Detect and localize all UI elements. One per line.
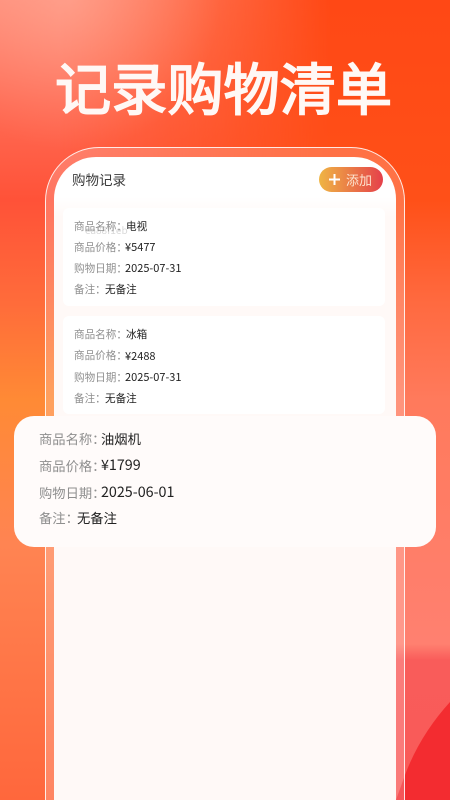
highlighted record card: range hood: 油烟机 — [101, 429, 141, 448]
record text: TV: 购物日期： — [74, 261, 127, 276]
record card: TV — [63, 208, 385, 306]
title: 记录购物清单 — [55, 46, 392, 127]
icon: plus — [329, 174, 340, 185]
record text: fridge: 购物日期： — [74, 370, 127, 385]
record text: fridge: 2025-07-31 — [125, 369, 181, 385]
record text: fridge: 商品价格： — [74, 348, 127, 363]
watermark: ea88f1eb — [85, 222, 128, 237]
record text: TV: 商品价格： — [74, 240, 127, 255]
name row: 商品名称： — [39, 429, 105, 448]
price row: 商品价格： — [39, 456, 105, 475]
record text: fridge: 无备注 — [105, 391, 137, 406]
record text: TV: 电视 — [126, 219, 147, 234]
phone screen — [54, 157, 396, 800]
highlighted record card: range hood: 无备注 — [77, 508, 117, 527]
record text: TV: ¥5477 — [125, 239, 156, 255]
screen heading: 购物记录 — [72, 169, 126, 189]
highlighted record card: range hood: ¥1799 — [101, 454, 141, 475]
highlighted record card: range hood: 2025-06-01 — [101, 481, 174, 502]
add button — [319, 167, 383, 192]
record text: fridge: 冰箱 — [126, 327, 147, 342]
note row: 备注： — [39, 508, 79, 527]
button label: 添加 — [346, 170, 372, 189]
record text: fridge: 商品名称： — [74, 327, 127, 342]
phone frame — [45, 147, 404, 800]
record card: fridge — [63, 316, 385, 414]
record text: fridge — [74, 327, 181, 406]
highlighted record card: range hood — [14, 416, 436, 547]
record text: fridge: 备注： — [74, 391, 106, 406]
record text: fridge: ¥2488 — [125, 348, 156, 364]
record text: TV: 备注： — [74, 282, 106, 297]
record text: TV: 2025-07-31 — [125, 260, 181, 276]
record text: TV: 无备注 — [105, 282, 137, 297]
date row: 购物日期： — [39, 483, 105, 502]
record text: TV — [74, 219, 181, 297]
record text: TV: 商品名称： — [74, 219, 127, 234]
